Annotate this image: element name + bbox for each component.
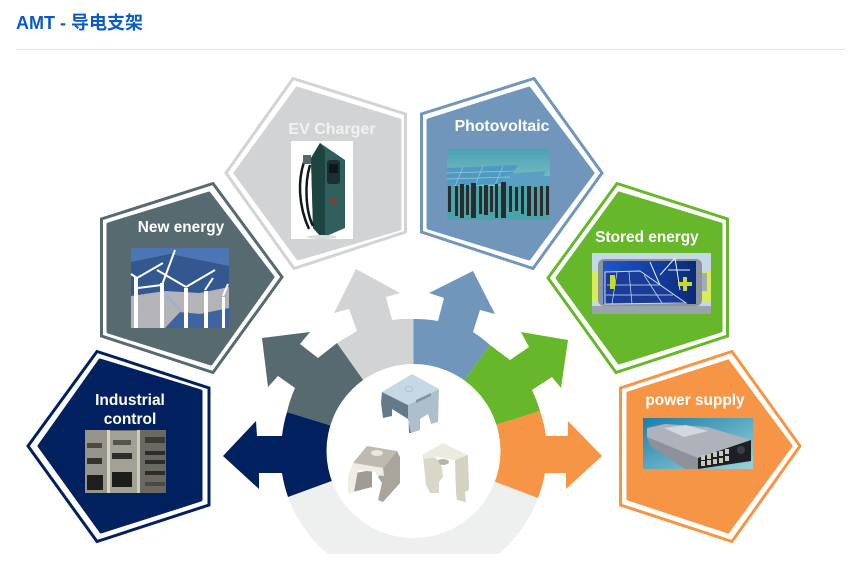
panel: Industrial control [28,352,209,542]
photo: EV charging station [291,141,353,239]
product: blue terminal bracket [381,374,439,433]
panel: power supply [620,352,800,542]
photo: solar panels [447,149,550,220]
arrow: EV charger [334,269,414,451]
arrow: new energy [262,332,414,451]
label: Stored energy: Stored energy [595,229,699,246]
label: Industrial control: Industrial [95,392,165,409]
bottom grey ring [288,481,538,554]
label: power supply: power supply [645,392,745,409]
product: cream terminal bracket [422,443,469,502]
panel: Stored energy [548,184,728,372]
arrow: industrial control [223,412,414,497]
photo: control cabinet [85,430,166,493]
panel: New energy [102,184,282,372]
photo: wind turbines [131,248,229,328]
panel: Photovoltaic [422,78,602,268]
arrow: power supply [414,411,602,498]
label: EV Charger: EV Charger [288,121,376,138]
arrow: stored energy [414,332,568,451]
photo: power supply unit [643,418,753,469]
center circle [326,364,500,538]
label: Industrial control: control [104,411,156,428]
label: New energy: New energy [138,219,225,236]
product: silver terminal bracket [348,446,400,502]
title: AMT - 导电支架 [16,13,143,33]
label: Photovoltaic: Photovoltaic [455,118,550,135]
photo: battery with solar panels [592,253,711,314]
arrow: photovoltaic [414,271,495,451]
panel: EV Charger [226,78,406,268]
